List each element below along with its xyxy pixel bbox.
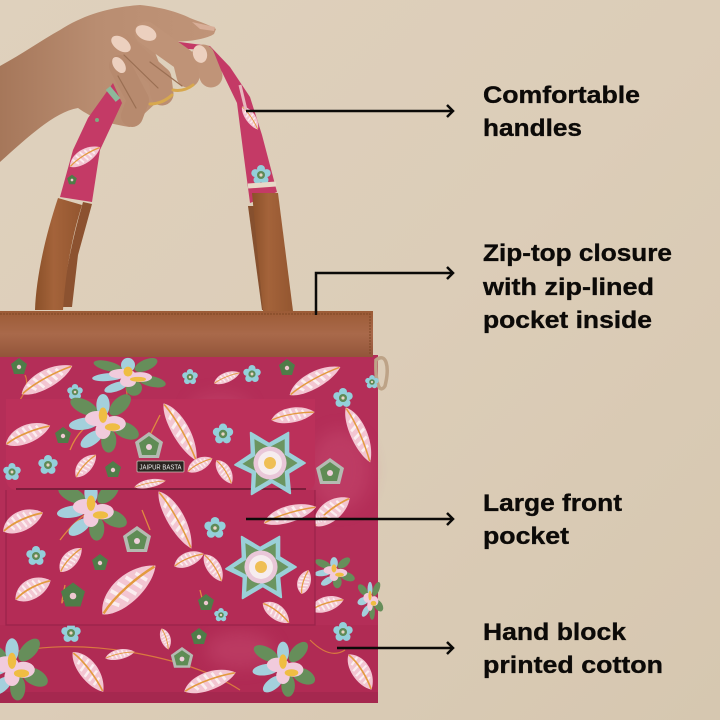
brand label — [137, 461, 184, 472]
label: hand block printed cotton: printed cotton — [483, 652, 663, 679]
back of hand and arm — [0, 5, 216, 162]
label: comfortable handles: Comfortable — [483, 82, 640, 109]
bag body — [0, 311, 387, 703]
arrow: hand block printed cotton — [337, 642, 453, 654]
side ring — [376, 358, 387, 389]
fabric body — [0, 355, 378, 703]
fingernails — [108, 22, 215, 76]
label: zip-top closure — [482, 240, 672, 334]
handles — [35, 41, 293, 311]
label: zip-top closure: with zip-lined — [482, 274, 654, 301]
leather top band — [0, 311, 373, 357]
label: comfortable handles: handles — [483, 115, 582, 142]
finger: little — [120, 66, 138, 116]
finger: index — [203, 56, 211, 76]
leather strap: left front — [35, 198, 82, 310]
finger: middle — [146, 33, 188, 76]
fingers gripping the handle — [118, 33, 211, 116]
pattern on main body — [0, 356, 385, 700]
leather strap: right front — [252, 193, 293, 311]
label: large front pocket: Large front — [483, 490, 622, 517]
leather strap: left back — [62, 202, 92, 307]
leather strap: right back — [248, 206, 272, 310]
brand label: JAIPUR BASTA — [140, 462, 182, 472]
mottled dye patches — [30, 394, 370, 668]
finger: ring — [122, 45, 162, 94]
fabric handle: left — [60, 83, 122, 202]
label: large front pocket — [483, 490, 622, 550]
arrow: zip-top closure — [316, 267, 453, 315]
label: large front pocket: pocket — [483, 523, 569, 550]
label: hand block printed cotton: Hand block — [483, 619, 627, 646]
pocket flap — [2, 391, 316, 494]
label: zip-top closure: pocket inside — [483, 307, 652, 334]
arrow: large front pocket — [246, 513, 453, 525]
front pocket — [0, 479, 318, 629]
label: comfortable handles — [483, 82, 640, 142]
fabric handle: right — [172, 41, 277, 203]
label: zip-top closure: Zip-top closure — [483, 240, 672, 267]
label: hand block printed cotton — [483, 619, 663, 679]
arrow: comfortable handles — [246, 105, 453, 117]
